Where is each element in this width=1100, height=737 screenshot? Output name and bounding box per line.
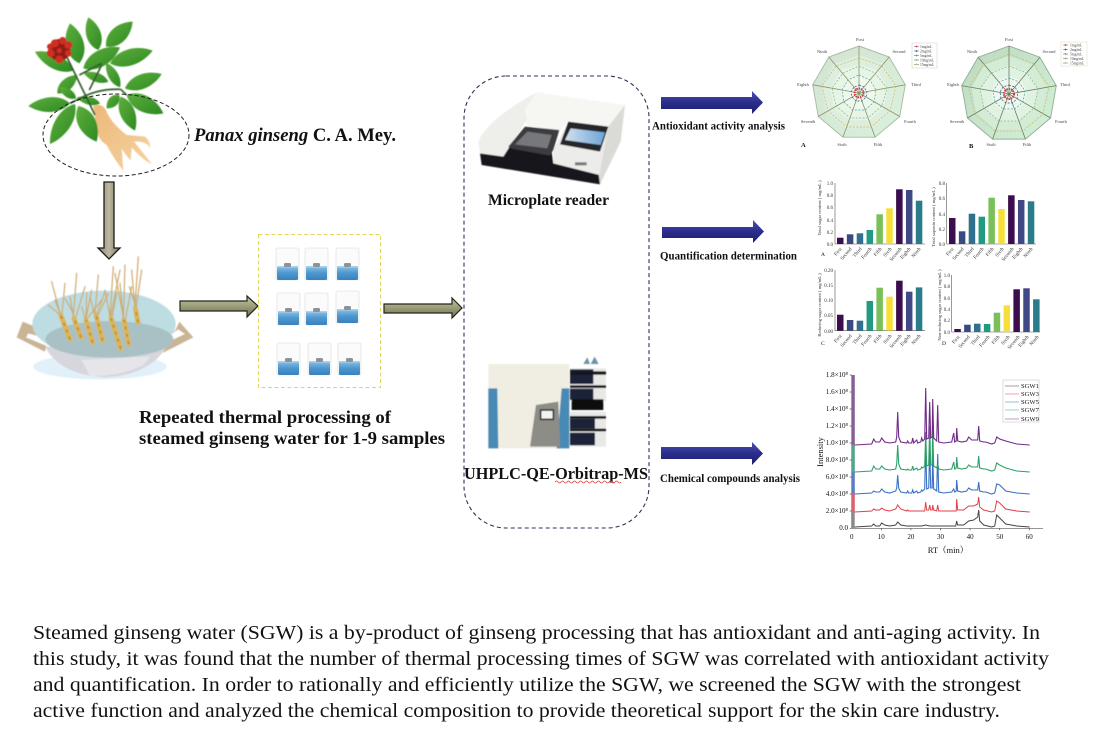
legend: 1mg/mL [920,45,932,49]
illustration: ginseng plant [28,17,163,171]
x labels: Fourth [979,335,992,349]
x labels [952,335,1041,351]
panel letter A: A [801,142,806,149]
bars [954,288,1040,332]
y tick labels: 0.0 [839,524,848,532]
x labels: Sixth [995,247,1006,258]
species label: Panax ginseng C. A. Mey. [193,126,396,146]
handles [17,322,47,352]
x labels [834,247,923,263]
root bodies [61,308,138,349]
x labels: Seventh [889,247,904,263]
x labels: Seventh [889,334,904,350]
axis labels: First [856,37,865,42]
y ticks: 0.8 [939,182,946,187]
y title: Total saponin content ( mg/mL ) [931,187,936,247]
axis labels [797,37,922,147]
y ticks: 0.10 [824,299,834,304]
y ticks: 0.00 [824,330,834,335]
left wing [478,92,537,157]
plate wells [515,132,552,148]
y ticks: 0.2 [827,231,834,236]
bottles [583,357,599,364]
y ticks [824,269,834,335]
legend: SGW9 [1021,416,1040,423]
label: antioxidant activity analysis: Antioxidant activity analysis [652,120,785,132]
legend: 2mg/mL [1070,48,1082,52]
y tick labels: 4.0×10⁸ [826,490,849,498]
summary paragraph: active function and analyzed the chemical composition to provide theoretical support for the skin care industry. [33,700,1000,722]
x labels: Fourth [861,247,874,261]
x tick labels: 60 [1026,533,1033,541]
x labels: Eighth [900,334,913,348]
x labels: Fifth [985,247,996,258]
bar chart B: total saponin [931,182,1036,263]
x labels: Third [853,247,864,259]
y ticks: 0.4 [939,213,946,218]
legend [912,43,937,68]
axis labels: Seventh [950,119,965,124]
hair roots [48,257,142,322]
axis labels: Third [1060,82,1071,87]
x tick labels: 0 [850,533,854,541]
panel letter: A [821,252,825,258]
stems [67,57,127,115]
screen [565,128,605,145]
axis labels: Third [911,82,922,87]
y axis title: Intensity [815,436,825,467]
arrow: beakers to instruments [384,298,462,318]
y ticks: 0.0 [939,243,946,248]
bar chart C: reducing sugar [817,269,925,350]
trace SGW9 [855,388,1030,445]
x labels: First [946,247,956,257]
plate [508,127,559,156]
label: chemical compounds analysis: Chemical compounds analysis [660,473,800,485]
axis labels [947,37,1071,147]
axis labels: Sixth [986,142,996,147]
trace SGW7 [855,426,1030,472]
axis labels: Eighth [947,82,960,87]
y tick labels: 8.0×10⁸ [826,456,849,464]
y ticks: 0.6 [939,197,946,202]
arrow: pot to beakers [180,296,258,317]
x labels: Sixth [883,247,894,258]
leaves [28,17,163,144]
model badge [575,162,587,165]
arrow: chemical compounds [661,442,763,465]
legend: SGW1 [1021,383,1039,390]
source [530,402,560,447]
y ticks [939,182,946,248]
x labels: Eighth [900,247,913,261]
x labels: Ninth [911,247,923,259]
y ticks [827,182,834,248]
x labels: Eighth [1018,335,1031,349]
bars [837,189,922,244]
y ticks: 0.6 [827,206,834,211]
legend: SGW7 [1021,407,1040,414]
radar chart B [947,37,1087,150]
illustration: pot with ginseng [17,257,193,379]
x tick labels: 30 [937,533,944,541]
y ticks: 0.0 [944,331,950,336]
x labels: Seventh [1001,247,1016,263]
trace SGW3 [855,497,1030,512]
legend: 15mg/mL [920,63,934,67]
y ticks: 0.2 [944,319,950,324]
y ticks: 0.2 [939,228,946,233]
axis labels: Ninth [817,49,828,54]
x labels: Second [840,334,854,349]
y tick labels: 1.0×10⁸ [826,439,849,447]
body [45,347,167,377]
x axis title: RT（min） [928,545,968,555]
axes [850,375,1043,530]
lid [525,92,625,132]
x labels: Third [971,335,982,347]
source window [541,410,553,419]
x labels: Ninth [911,334,923,346]
spokes [813,46,905,137]
x labels: Seventh [1007,335,1022,351]
y ticks: 0.4 [944,308,950,313]
series rings [822,58,896,127]
x tick labels [850,533,1033,541]
arrow: antioxidant [661,91,763,114]
bar chart D: non-reducing sugar [937,269,1041,351]
y title: Non-reducing sugar content ( mg/mL ) [937,269,942,341]
legend [1061,42,1087,66]
x tick labels: 20 [907,533,915,541]
bars [949,195,1034,244]
axis labels: Fifth [1023,142,1032,147]
y ticks: 0.4 [827,219,834,224]
caption: thermal processing: Repeated thermal processing of [139,407,392,427]
summary paragraph: this study, it was found that the number of thermal processing times of SGW was correlated with antioxidant activity [33,648,1050,670]
x labels: Fourth [861,334,874,348]
summary paragraph: Steamed ginseng water (SGW) is a by-product of ginseng processing that has antioxidant and anti-aging activity. In [33,622,1040,644]
y ticks: 0.6 [944,297,950,302]
x labels: First [952,335,962,345]
x labels: First [834,334,844,344]
x tick labels: 50 [996,533,1004,541]
summary paragraph: and quantification. In order to rationally and efficiently utilize the SGW, we screened the SGW with the strongest [33,674,1021,696]
initial solvent peak [852,375,855,528]
y tick labels: 6.0×10⁸ [826,473,849,481]
legend [1003,380,1040,423]
y ticks: 0.20 [824,269,834,274]
x labels [946,247,1035,263]
y ticks: 0.8 [944,285,950,290]
label: UHPLC-QE-Orbitrap-MS: UHPLC-QE-Orbitrap-MS [464,464,648,483]
y title: Total sugar content ( mg/mL ) [817,180,822,236]
x labels: Third [853,334,864,346]
axis labels: Second [893,49,906,54]
chromatogram [815,371,1043,555]
side panels [488,388,569,448]
y tick labels: 1.8×10⁸ [826,371,849,379]
x labels: First [834,247,844,257]
base [480,143,602,184]
x labels: Second [840,247,854,262]
illustration: microplate reader [478,92,625,184]
panel: instruments dashed box [464,76,649,528]
trace SGW1 [855,510,1030,527]
water [45,321,173,358]
axis labels: Ninth [967,49,978,54]
panel letter: C [821,341,825,347]
x labels: Second [952,247,966,262]
axis labels: Eighth [797,82,810,87]
x tick labels: 40 [967,533,974,541]
y tick labels: 1.6×10⁸ [826,388,849,396]
label: microplate reader: Microplate reader [488,192,609,209]
y ticks: 1.0 [827,182,834,187]
screen bezel [560,122,608,152]
x labels: Fifth [991,335,1002,346]
illustration: UHPLC-MS instrument [488,357,606,448]
y tick labels [826,371,849,532]
x labels: Sixth [1001,335,1012,346]
panel letter B: B [969,143,974,150]
legend: 5mg/mL [920,54,932,58]
beakers [276,248,361,375]
right side [598,105,625,184]
center [854,88,864,98]
y title: Reducing sugar content ( mg/mL ) [817,273,822,337]
x labels: Ninth [1023,247,1035,259]
root shading [61,308,138,349]
x labels: Third [965,247,976,259]
x labels: Second [958,335,972,350]
x labels: Eighth [1012,247,1025,261]
axis labels: Sixth [837,142,847,147]
body highlight [82,357,150,376]
x labels: Fifth [873,334,884,345]
legend: 2mg/mL [920,50,932,54]
front panel [553,125,608,175]
x labels: Fourth [973,247,986,261]
axis labels: Fifth [874,142,883,147]
HPLC stack [570,368,606,447]
caption: thermal processing: steamed ginseng water for 1-9 samples [139,428,445,448]
y tick labels: 1.2×10⁸ [826,422,849,430]
shadow [33,354,167,379]
legend: SGW5 [1021,399,1040,406]
y ticks: 1.0 [944,274,950,279]
series rings [969,54,1049,131]
berries [47,37,72,63]
y ticks: 0.8 [827,194,834,199]
legend: 1mg/mL [1070,44,1082,48]
axis labels: Seventh [801,119,816,124]
x labels: Ninth [1029,335,1041,347]
panel letter: D [942,341,946,347]
y ticks: 0.15 [824,284,834,289]
radar chart A [797,37,937,149]
legend: 10mg/mL [1070,57,1084,61]
y tick labels: 1.4×10⁸ [826,405,849,413]
y ticks: 0.0 [827,243,834,248]
axis labels: Second [1043,49,1056,54]
legend: SGW3 [1021,391,1040,398]
y ticks: 0.05 [824,314,834,319]
y tick labels: 2.0×10⁸ [826,507,849,515]
axis labels: Fourth [904,119,917,124]
rings [972,56,1046,130]
rings [822,55,896,129]
root [93,105,152,171]
trace SGW5 [855,444,1030,494]
y ticks [944,274,950,336]
axis labels: First [1005,37,1014,42]
dashed ellipse around root [43,94,189,176]
x labels [834,334,923,350]
bars [837,281,922,331]
arrow: quantification [662,220,764,243]
panel: nine beakers [258,234,380,388]
spokes [962,46,1056,139]
axis labels: Fourth [1055,119,1068,124]
bar chart A: total sugar [817,180,925,263]
arrow: plant to pot [98,182,120,259]
label: quantification determination: Quantification determination [660,250,798,262]
x labels: Fifth [873,247,884,258]
cabinet [488,364,569,448]
center [1004,89,1014,99]
rim [32,291,176,357]
x labels: Sixth [883,334,894,345]
legend: 5mg/mL [1070,52,1082,56]
x tick labels: 10 [878,533,885,541]
legend: 10mg/mL [920,58,934,62]
legend: 15mg/mL [1070,62,1084,66]
